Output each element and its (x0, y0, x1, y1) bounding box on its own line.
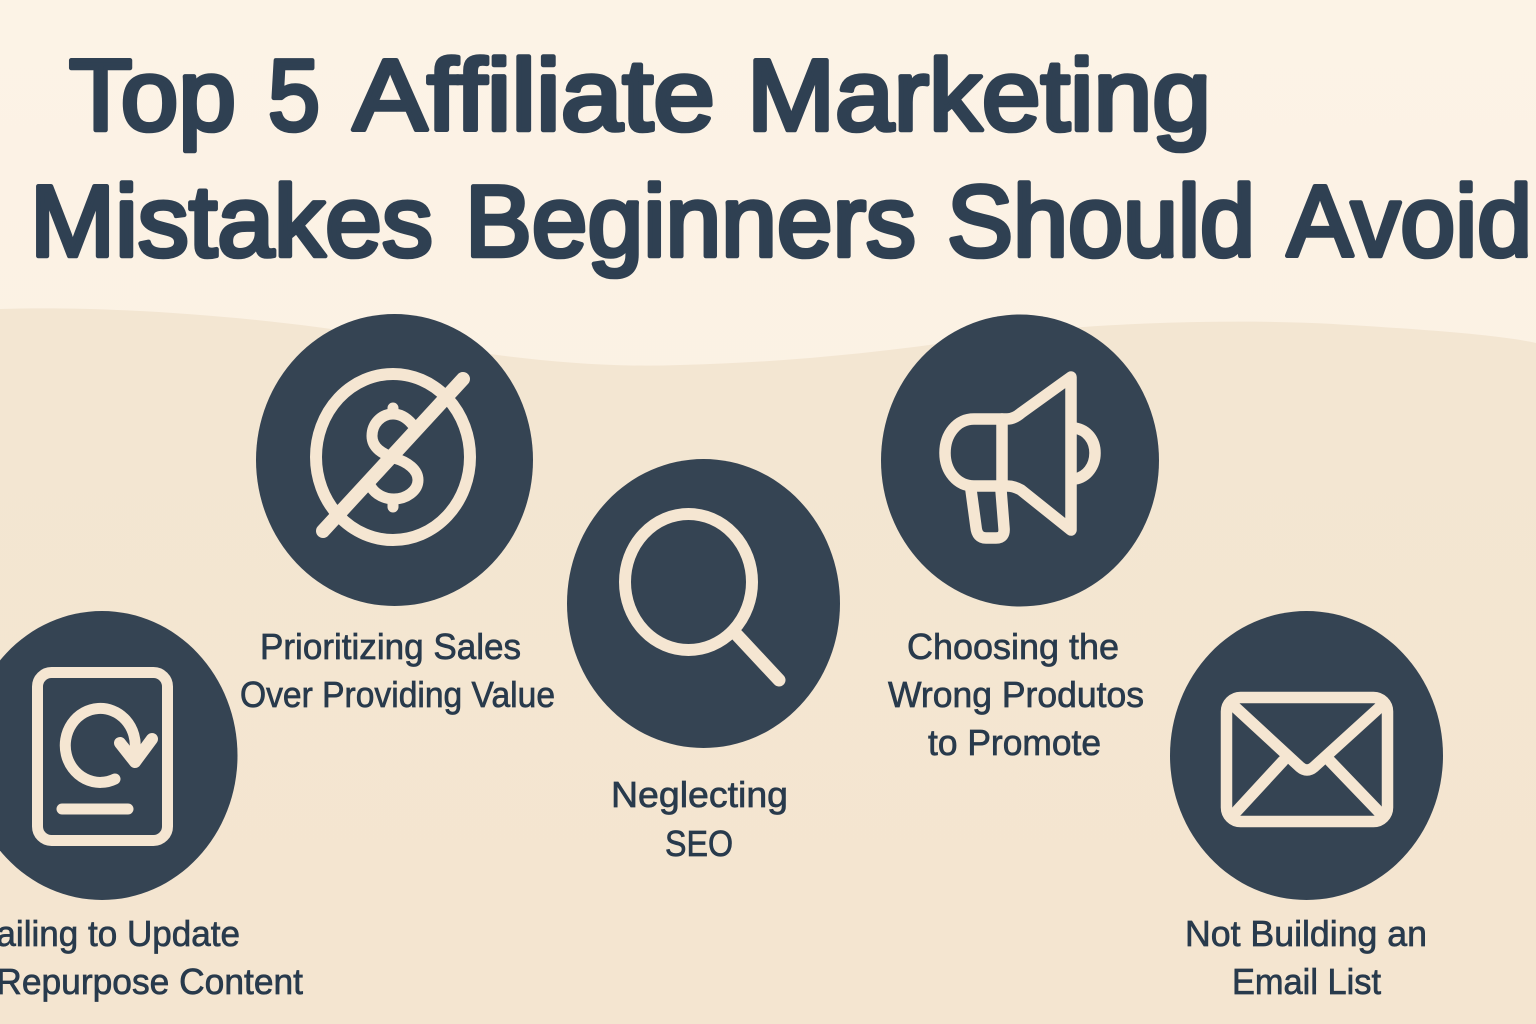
label: neglecting seo: SEO (665, 823, 733, 864)
title: Mistakes (30, 166, 433, 278)
label: neglecting seo: Neglecting (611, 774, 788, 815)
title: Beginners (465, 166, 916, 278)
mistake: failing to update content (0, 611, 303, 1002)
label: neglecting seo (611, 774, 788, 864)
title (30, 40, 1532, 278)
icon: document with refresh arrow (38, 672, 168, 840)
mistake: prioritizing sales (240, 314, 555, 715)
icon: envelope (1226, 698, 1388, 822)
title: 5 (268, 40, 320, 152)
mistake: choosing the wrong products (881, 314, 1159, 763)
icon: crossed-out dollar (316, 374, 470, 540)
label: wrong products: Wrong Produtos (888, 674, 1144, 715)
circle badge: email list (1170, 611, 1443, 900)
mistake: not building an email list (1170, 611, 1443, 1002)
label: email list: Email List (1232, 961, 1381, 1002)
label: wrong products (888, 626, 1144, 763)
icon: megaphone (945, 377, 1095, 538)
circle badge: neglecting seo (567, 459, 840, 748)
title: Top (69, 40, 236, 152)
label: email list (1185, 913, 1427, 1002)
mistake: neglecting seo (567, 459, 840, 864)
label: wrong products: to Promote (928, 722, 1101, 763)
title: Avoid (1287, 166, 1532, 278)
label: prioritizing sales: Prioritizing Sales (260, 626, 521, 667)
label: prioritizing sales (240, 626, 555, 715)
title: Should (947, 166, 1255, 278)
title: Marketing (747, 40, 1211, 152)
circle badge: wrong products (881, 314, 1159, 606)
icon: magnifying glass (625, 514, 779, 680)
background wave (0, 308, 1536, 1024)
circle badge: update content (0, 611, 238, 900)
circle badge: prioritizing sales (256, 314, 533, 606)
label: wrong products: Choosing the (907, 626, 1119, 667)
title: Affiliate (353, 40, 715, 152)
label: email list: Not Building an (1185, 913, 1427, 954)
label: update content (0, 913, 303, 1002)
label: prioritizing sales: Over Providing Value (240, 674, 555, 715)
